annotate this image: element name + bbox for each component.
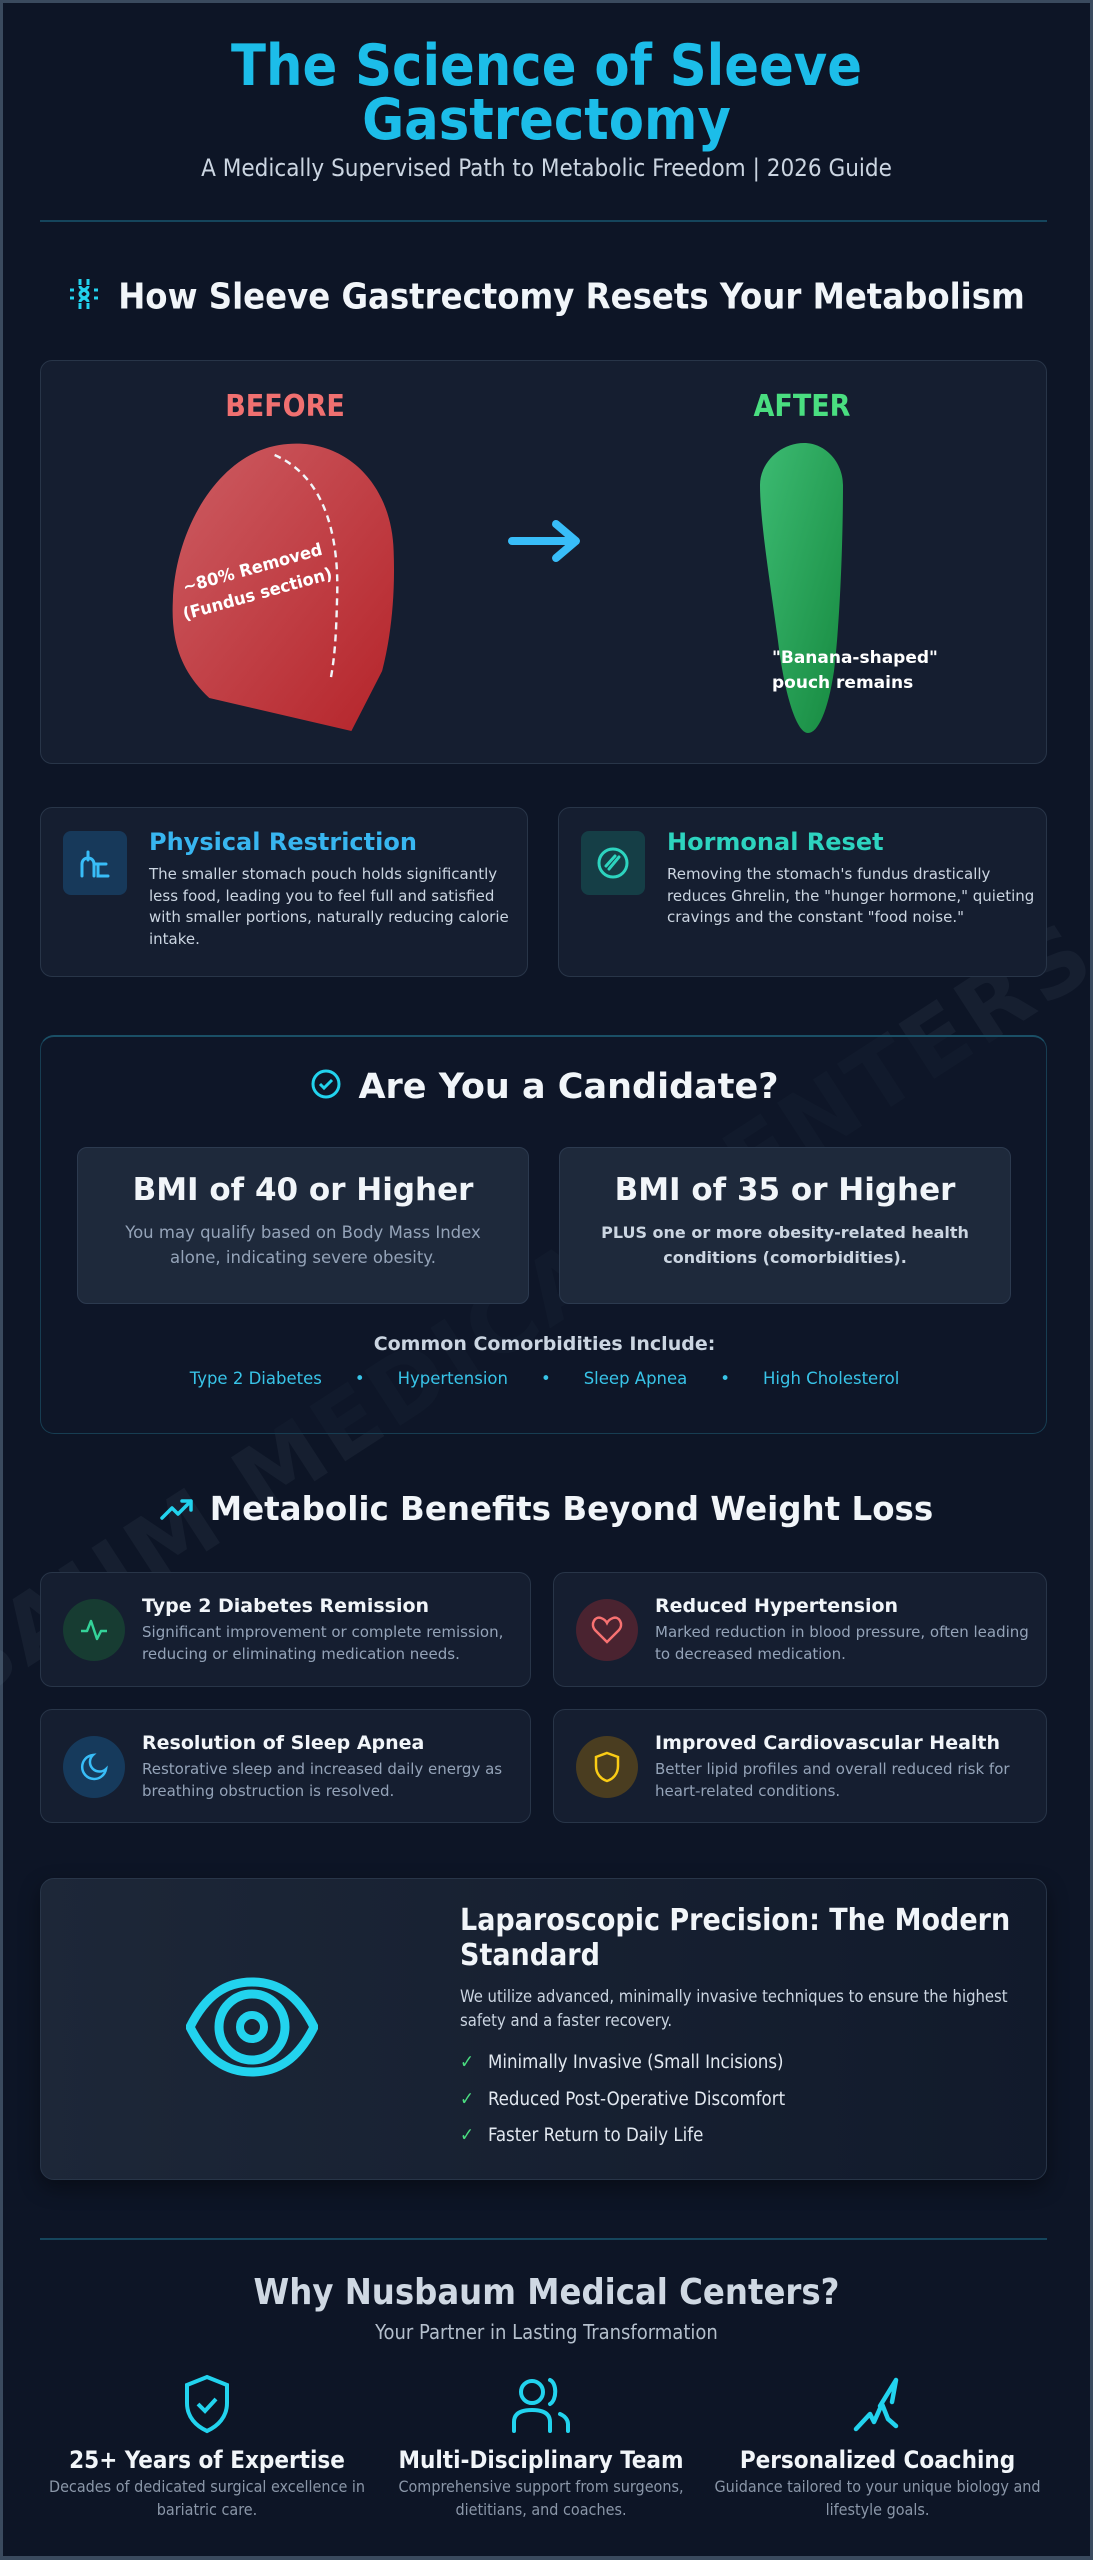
benefit: sleep apnea: Restorative sleep and increased daily energy as breathing obstruction is resolved. — [142, 1760, 502, 1800]
title: Gastrectomy — [362, 87, 731, 153]
pouch after — [760, 443, 843, 733]
card: physical restriction: The smaller stomach pouch holds significantly less food, leading you to feel full and satisfied with smaller portions, naturally reducing calorie intake. — [149, 865, 509, 948]
box: bmi 35: PLUS one or more obesity-related health conditions (comorbidities). — [601, 1223, 969, 1267]
benefit: diabetes: Type 2 Diabetes Remission — [142, 1595, 429, 1617]
card: physical restriction — [40, 807, 528, 977]
text block: ✓ Reduced Post-Operative Discomfort — [460, 2088, 785, 2110]
text block — [460, 1903, 1010, 2146]
comorbidities: Type 2 Diabetes — [190, 1369, 322, 1388]
heading: how sleeve resets metabolism: How Sleeve Gastrectomy Resets Your Metabolism — [118, 276, 1025, 318]
comorbidities: • — [541, 1369, 551, 1388]
feature: coaching — [714, 2378, 1041, 2519]
benefit: hypertension — [553, 1572, 1047, 1687]
feature: expertise — [49, 2374, 365, 2519]
box: bmi 35 — [559, 1147, 1011, 1304]
text block: ✓ Faster Return to Daily Life — [460, 2125, 703, 2146]
feature: team — [398, 2378, 684, 2519]
feature: team: Multi-Disciplinary Team — [398, 2446, 684, 2474]
feature: expertise: Decades of dedicated surgical excellence in bariatric care. — [49, 2477, 365, 2519]
box: bmi 35: BMI of 35 or Higher — [615, 1172, 955, 1208]
feature: expertise: 25+ Years of Expertise — [69, 2446, 345, 2474]
arrow — [508, 520, 580, 562]
stomach before: ~80% Removed — [181, 540, 324, 597]
label: after: AFTER — [754, 389, 850, 424]
heading: metabolic benefits: Metabolic Benefits Beyond Weight Loss — [210, 1490, 933, 1528]
title — [231, 33, 862, 153]
box: bmi 40: You may qualify based on Body Mass Index alone, indicating severe obesity. — [125, 1223, 481, 1267]
icon: eye — [186, 1978, 318, 2076]
comorbidities — [190, 1333, 899, 1388]
benefit: cardiovascular — [553, 1709, 1047, 1823]
card: hormonal reset — [558, 807, 1047, 977]
title: The Science of Sleeve — [231, 33, 862, 99]
panel: before/after — [40, 360, 1047, 764]
benefit: diabetes: Significant improvement or complete remission, reducing or eliminating medication needs. — [142, 1623, 503, 1663]
icon: hormone — [581, 831, 645, 895]
comorbidities: High Cholesterol — [763, 1369, 899, 1388]
text block: We utilize advanced, minimally invasive techniques to ensure the highest safety and a faster recovery. — [460, 1987, 1008, 2030]
stomach before — [172, 444, 394, 731]
heading: why nusbaum: Why Nusbaum Medical Centers? — [254, 2272, 839, 2313]
card: hormonal reset: Hormonal Reset — [667, 828, 884, 856]
pouch label: "Banana-shaped" — [772, 648, 938, 668]
panel: laparoscopic — [40, 1878, 1047, 2180]
stomach before: (Fundus section) — [181, 564, 334, 624]
panel: candidate — [40, 1035, 1047, 1434]
text block: ✓ Minimally Invasive (Small Incisions) — [460, 2052, 784, 2073]
icon: dna — [70, 279, 98, 309]
card: physical restriction: Physical Restriction — [149, 828, 417, 856]
box: bmi 40 — [77, 1147, 529, 1304]
benefit: hypertension: Reduced Hypertension — [655, 1595, 898, 1617]
icon: restriction — [63, 831, 127, 895]
label: before: BEFORE — [225, 389, 345, 424]
benefit: hypertension: Marked reduction in blood pressure, often leading to decreased medication. — [655, 1623, 1029, 1663]
text block: Laparoscopic Precision: The Modern Standard — [460, 1903, 1010, 1973]
benefit: diabetes — [40, 1572, 531, 1687]
benefit: cardiovascular: Better lipid profiles and overall reduced risk for heart-related conditions. — [655, 1760, 1010, 1800]
feature: coaching: Guidance tailored to your unique biology and lifestyle goals. — [714, 2477, 1041, 2519]
comorbidities: • — [355, 1369, 365, 1388]
benefit: sleep apnea — [40, 1709, 531, 1823]
box: bmi 40: BMI of 40 or Higher — [133, 1172, 473, 1208]
comorbidities: Sleep Apnea — [584, 1369, 687, 1388]
feature: coaching: Personalized Coaching — [740, 2446, 1015, 2474]
benefit: cardiovascular: Improved Cardiovascular Health — [655, 1732, 1000, 1754]
subtitle: partner: Your Partner in Lasting Transformation — [375, 2320, 718, 2344]
heading: candidate: Are You a Candidate? — [358, 1067, 779, 1107]
pouch label — [772, 648, 938, 693]
card: hormonal reset: Removing the stomach's fundus drastically reduces Ghrelin, the "hunger hormone," quieting cravings and the constant "food noise." — [667, 865, 1034, 926]
comorbidities: Hypertension — [398, 1369, 508, 1388]
comorbidities: • — [720, 1369, 730, 1388]
feature: team: Comprehensive support from surgeons, dietitians, and coaches. — [398, 2477, 684, 2519]
benefit: sleep apnea: Resolution of Sleep Apnea — [142, 1732, 424, 1754]
subtitle: A Medically Supervised Path to Metabolic Freedom | 2026 Guide — [201, 154, 892, 182]
comorbidities: Common Comorbidities Include: — [374, 1333, 715, 1355]
pouch label: pouch remains — [772, 673, 913, 693]
